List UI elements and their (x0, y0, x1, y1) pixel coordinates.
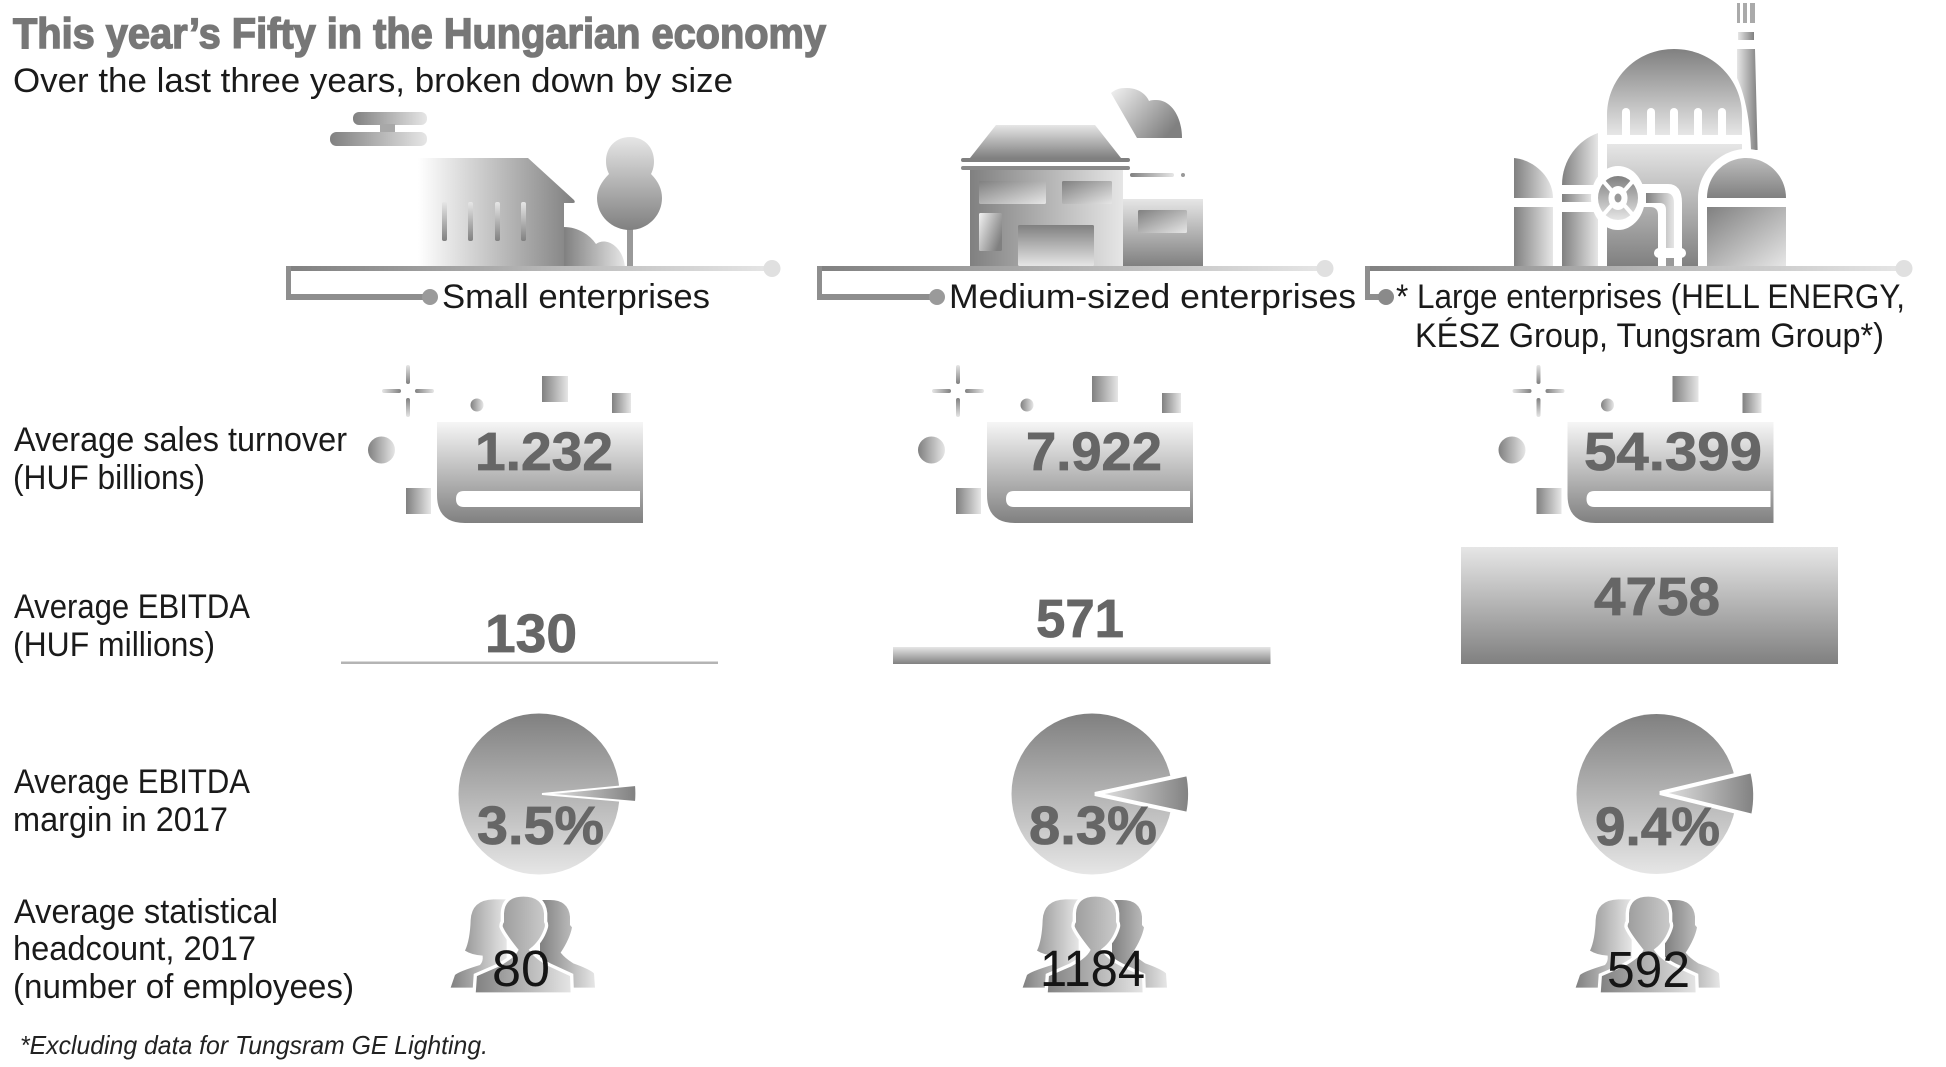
label: small enterprises: Small enterprises (442, 278, 710, 316)
icon: smoke cloud (1111, 88, 1182, 138)
icon: factory (1514, 3, 1795, 266)
turnover badge: large: 54.399 (1584, 422, 1762, 482)
turnover badge: large (1498, 365, 1774, 523)
connector line (1365, 260, 1912, 305)
pie: medium 8.3% (1012, 714, 1190, 874)
row label: statistical headcount (13, 893, 354, 1006)
headcount: small: 80 (492, 940, 550, 997)
row label: statistical headcount: (number of employees) (13, 968, 354, 1006)
label: large enterprises: KÉSZ Group, Tungsram Group*) (1415, 317, 1884, 355)
icon: tree (597, 137, 662, 267)
row label: EBITDA margin: Average EBITDA (14, 763, 250, 801)
row label: average EBITDA (13, 588, 250, 664)
pie: small 3.5%: 3.5% (477, 796, 604, 856)
footnote: *Excluding data for Tungsram GE Lighting. (20, 1030, 488, 1060)
EBITDA bar: medium: 571 (1036, 589, 1124, 649)
row label: average EBITDA: Average EBITDA (14, 588, 250, 626)
connector line (817, 260, 1334, 305)
pie: medium 8.3%: 8.3% (1029, 796, 1157, 856)
headcount: medium: 1184 (1040, 940, 1145, 997)
label: large enterprises: * Large enterprises (HELL ENERGY, (1396, 278, 1905, 316)
row label: EBITDA margin (13, 763, 250, 839)
EBITDA bar: large: 4758 (1594, 567, 1720, 627)
headcount: small (451, 895, 595, 997)
label: medium enterprises: Medium-sized enterprises (949, 278, 1356, 316)
pie: small 3.5% (458, 714, 636, 874)
EBITDA bar: medium (893, 589, 1270, 664)
row label: average sales turnover: Average sales turnover (14, 421, 347, 459)
row label: EBITDA margin: margin in 2017 (13, 801, 228, 839)
subtitle: Over the last three years, broken down by size (13, 62, 733, 100)
row label: statistical headcount: Average statistical (14, 893, 278, 931)
icon: small house (418, 158, 625, 270)
row label: statistical headcount: headcount, 2017 (13, 930, 256, 968)
turnover badge: medium (918, 365, 1193, 523)
headcount: large (1576, 895, 1720, 998)
icon: cloud (330, 112, 427, 146)
headcount: large: 592 (1607, 941, 1690, 998)
headcount: medium (1023, 895, 1167, 997)
pie: large 9.4% (1576, 714, 1755, 874)
EBITDA bar: large (1461, 547, 1838, 664)
title: This year’s Fifty in the Hungarian economy (13, 10, 826, 58)
icon: medium building (961, 125, 1203, 266)
turnover badge: small (368, 365, 643, 523)
pie: large 9.4%: 9.4% (1595, 797, 1720, 857)
label: large enterprises (1396, 278, 1905, 355)
connector line (286, 260, 780, 305)
EBITDA bar: small: 130 (485, 604, 577, 664)
panel: large enterprises header (1365, 3, 1912, 355)
turnover badge: medium: 7.922 (1026, 422, 1162, 482)
panel: small enterprises header (286, 112, 780, 316)
panel: medium enterprises header (817, 88, 1356, 316)
row label: average sales turnover (13, 421, 347, 497)
turnover badge: small: 1.232 (475, 422, 613, 482)
row label: average EBITDA: (HUF millions) (13, 626, 215, 664)
row label: average sales turnover: (HUF billions) (13, 459, 205, 497)
